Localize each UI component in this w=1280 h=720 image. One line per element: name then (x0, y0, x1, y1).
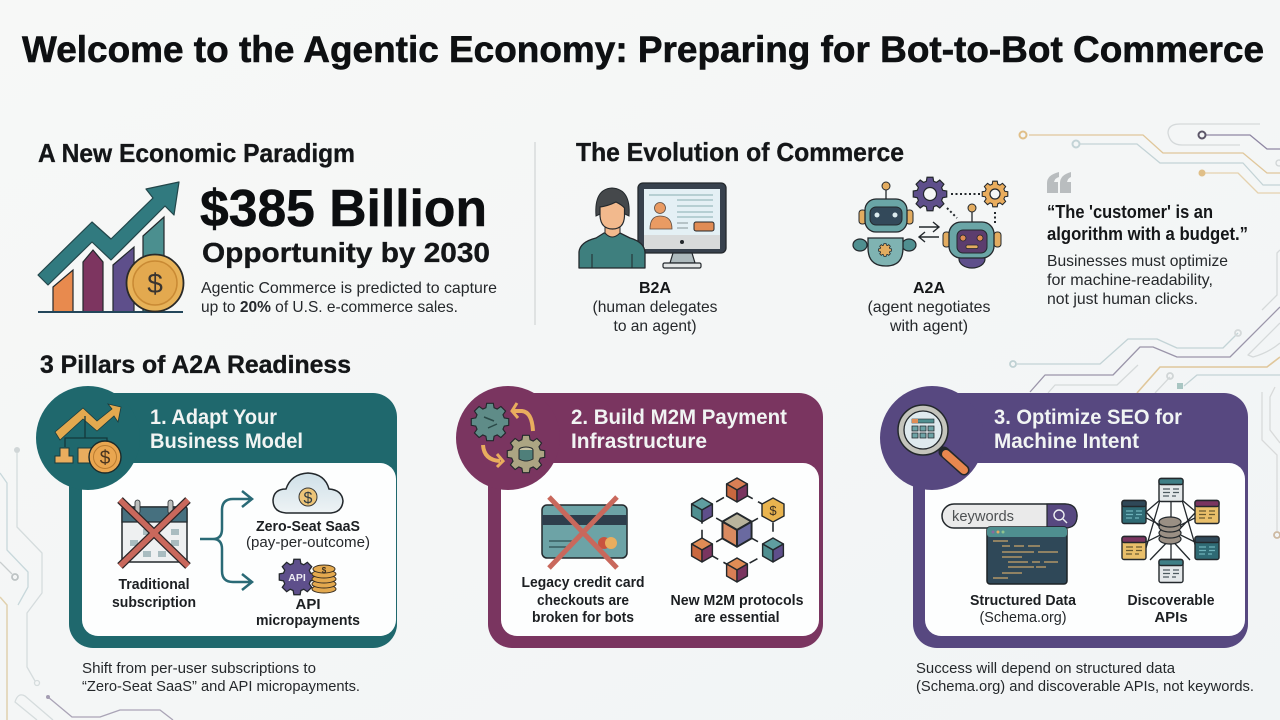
quote: “The 'customer' is an (1047, 202, 1213, 222)
label: zero-seat saas (246, 518, 370, 551)
title: Welcome to the Agentic Economy: Preparing for Bot-to-Bot Commerce (22, 29, 1264, 70)
arrow: split to two options (200, 491, 252, 590)
icon: discoverable api hub (1122, 478, 1219, 582)
panel 2 heading: 2. Build M2M Payment (571, 406, 787, 429)
label: b2a (592, 280, 718, 335)
icon: structured data code window (987, 527, 1067, 584)
label: legacy credit card: Legacy credit card (522, 574, 644, 591)
icon: growth and coin (55, 404, 121, 473)
icon: cloud with dollar: $ (304, 490, 313, 507)
panel 2 heading (571, 406, 787, 453)
heading: a new economic paradigm: A New Economic Paradigm (38, 138, 355, 168)
icon: crossed-out calendar (120, 500, 188, 566)
icon: gears and cycle arrows (471, 403, 545, 473)
label: b2a: to an agent) (614, 318, 696, 335)
label: api micropayments: micropayments (256, 612, 360, 629)
caption: pillar 1: “Zero-Seat SaaS” and API micropayments. (82, 678, 360, 695)
caption: pillar 1 (82, 660, 360, 695)
caption: pillar 3: Success will depend on structured data (916, 660, 1176, 677)
label: new m2m protocols (670, 592, 804, 626)
caption: pillar 1: Shift from per-user subscriptions to (82, 660, 316, 677)
label: structured data (970, 592, 1077, 626)
panel 1 heading: Business Model (150, 430, 303, 453)
label: api micropayments: API (295, 596, 321, 613)
label: zero-seat saas: (pay-per-outcome) (246, 534, 370, 551)
label: traditional subscription: subscription (112, 594, 196, 611)
quote body text: not just human clicks. (1047, 291, 1198, 308)
icon: search bar (942, 504, 1077, 528)
heading: 3 pillars of a2a readiness: 3 Pillars of A2A Readiness (40, 351, 351, 379)
icon: cloud with dollar (273, 473, 343, 513)
label: new m2m protocols: are essential (694, 609, 780, 626)
stat: $385 billion: $385 Billion (200, 180, 487, 238)
icon: search bar: keywords (952, 508, 1014, 525)
label: legacy credit card: checkouts are (537, 592, 629, 609)
icon: api gear and coins: API (288, 572, 306, 584)
icon: growth and coin: $ (100, 448, 111, 469)
label: discoverable apis (1128, 592, 1214, 626)
quote body text: Businesses must optimize (1047, 253, 1228, 270)
stat description: Agentic Commerce is predicted to capture (201, 280, 497, 297)
icon: two robots negotiating (853, 177, 1008, 268)
label: traditional subscription (112, 576, 196, 611)
label: api micropayments (256, 596, 360, 629)
label: zero-seat saas: Zero-Seat SaaS (256, 518, 360, 535)
icon: api gear and coins (279, 559, 336, 595)
icon: growth chart with coin (38, 182, 184, 312)
panel 1 heading: 1. Adapt Your (150, 406, 277, 429)
heading: the evolution of commerce: The Evolution of Commerce (576, 137, 904, 167)
icon: quotation mark (1047, 172, 1071, 193)
stat subtitle: Opportunity by 2030 (202, 237, 490, 268)
icon: m2m cube network: $ (769, 503, 777, 518)
caption: pillar 3: (Schema.org) and discoverable APIs, not keywords. (916, 678, 1254, 695)
panel 1 heading (150, 406, 303, 453)
panel 3 heading (994, 406, 1182, 453)
label: b2a: (human delegates (592, 299, 718, 316)
label: discoverable apis: APIs (1154, 609, 1188, 626)
label: a2a: A2A (913, 280, 945, 297)
quote (1047, 202, 1248, 244)
icon: human at a monitor (579, 183, 726, 268)
panel: pillar 3 optimize seo for machine intent (880, 386, 1248, 648)
quote body text (1047, 253, 1228, 308)
label: traditional subscription: Traditional (118, 576, 190, 593)
quote body text: for machine-readability, (1047, 272, 1213, 289)
label: discoverable apis: Discoverable (1128, 592, 1214, 609)
label: b2a: B2A (639, 280, 671, 297)
panel 3 heading: Machine Intent (994, 430, 1139, 453)
label: a2a: with agent) (889, 318, 968, 335)
label: a2a: (agent negotiates (868, 299, 990, 316)
panel 2 heading: Infrastructure (571, 430, 707, 453)
label: new m2m protocols: New M2M protocols (670, 592, 804, 609)
label: structured data: Structured Data (970, 592, 1077, 609)
icon: api gear and coins: $ (322, 566, 327, 575)
panel 3 heading: 3. Optimize SEO for (994, 406, 1182, 429)
panel: pillar 1 adapt your business model (36, 386, 397, 648)
panel: pillar 2 build m2m payment infrastructure (456, 386, 823, 648)
label: structured data: (Schema.org) (980, 609, 1066, 626)
stat description (201, 280, 497, 316)
label: legacy credit card (522, 574, 644, 626)
icon: growth chart with coin: $ (147, 268, 163, 299)
label: legacy credit card: broken for bots (532, 609, 634, 626)
icon: magnifier over data table (898, 405, 964, 470)
caption: pillar 3 (916, 660, 1254, 695)
icon: crossed-out credit card (542, 497, 627, 568)
label: a2a (868, 280, 990, 335)
stat description: up to 20% of U.S. e-commerce sales. (201, 299, 458, 316)
icon: m2m cube network (692, 478, 784, 582)
quote: algorithm with a budget.” (1047, 224, 1248, 244)
